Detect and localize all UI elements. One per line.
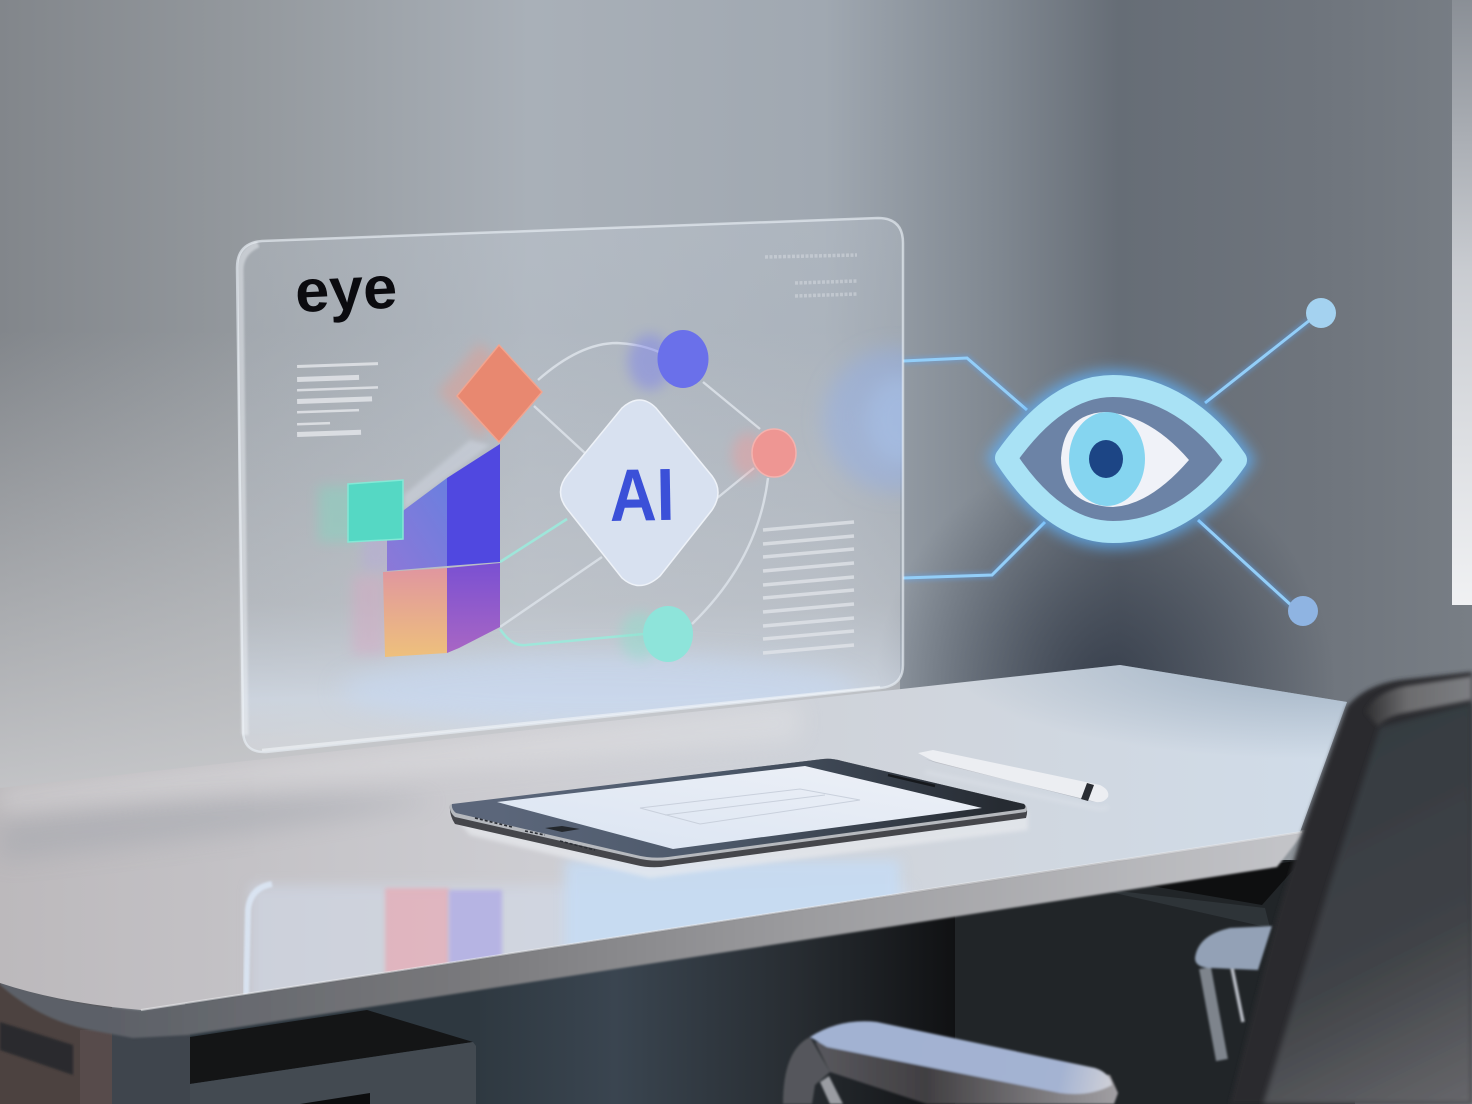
- tablet: [450, 759, 1028, 878]
- title: eye: eye: [294, 254, 398, 325]
- chair rim highlight: [1365, 676, 1472, 726]
- text block left: [297, 362, 378, 437]
- eye outline: [1006, 386, 1236, 532]
- chair back panel: [1230, 672, 1472, 1104]
- shape: orange diamond: [457, 345, 542, 442]
- glass outline: [237, 218, 903, 752]
- AI diamond badge: [560, 400, 718, 586]
- iris: [1069, 412, 1145, 506]
- tablet screen: [497, 766, 982, 849]
- eye hologram: [903, 298, 1336, 626]
- stylus pen: [918, 750, 1108, 809]
- connector lines: [903, 320, 1310, 606]
- network lines: [500, 343, 768, 627]
- tablet lip: [450, 759, 1027, 867]
- eye socket: [1006, 386, 1236, 532]
- node bottom right: [1288, 596, 1318, 626]
- desk front edge: [0, 831, 1305, 1038]
- node top right: [1306, 298, 1336, 328]
- chair right armrest: [1195, 926, 1272, 1060]
- AI label: AI: [609, 453, 675, 537]
- blurred shape echoes: [318, 334, 764, 660]
- chair: [783, 672, 1472, 1104]
- shape: green square: [348, 480, 403, 542]
- desk shading and reflection: [0, 640, 1470, 1010]
- chart blocks: [383, 444, 500, 657]
- pupil: [1089, 440, 1123, 478]
- text block right: [763, 522, 854, 653]
- node: red circle: [752, 429, 796, 477]
- small text top right: [765, 255, 857, 296]
- node: teal circle: [643, 606, 693, 662]
- left desk leg: [0, 975, 190, 1104]
- blue ripple glow: [822, 344, 903, 496]
- drawer unit: [190, 1010, 476, 1104]
- sclera: [1061, 412, 1189, 507]
- chair front armrest: [783, 1021, 1118, 1104]
- area under the desk: [0, 860, 1355, 1104]
- tablet reflection: [450, 812, 1028, 878]
- desk top: [0, 665, 1347, 1010]
- eye glow: [1006, 386, 1236, 532]
- desk: [0, 665, 1347, 1038]
- glass panel: [237, 218, 967, 752]
- node: blue circle: [658, 330, 708, 388]
- tablet bezel: [452, 759, 1025, 858]
